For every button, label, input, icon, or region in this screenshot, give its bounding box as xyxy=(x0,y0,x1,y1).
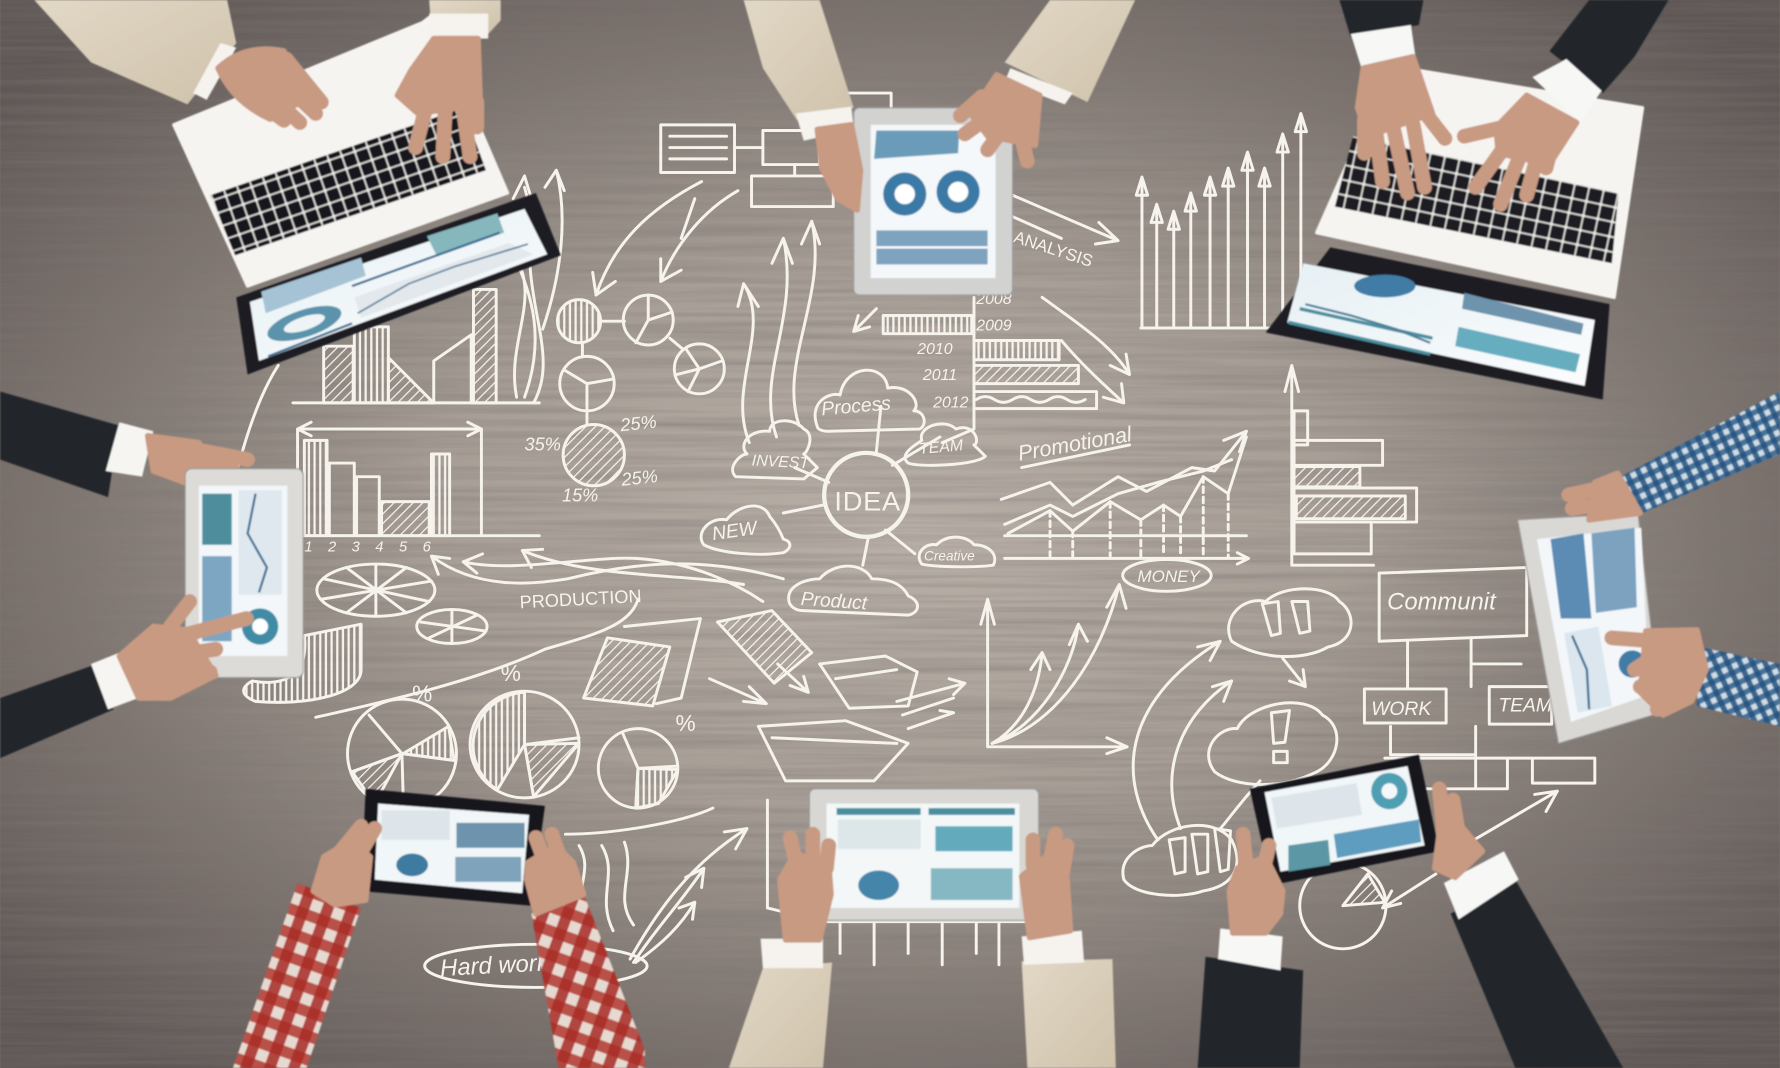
mind map labels: Promotional xyxy=(1016,421,1135,466)
community labels xyxy=(1371,588,1553,720)
chalk drawing: rising arrow bars xyxy=(1136,113,1322,328)
percentage labels: 15% xyxy=(562,486,598,506)
percentage labels xyxy=(525,412,659,506)
percent signs xyxy=(412,660,696,736)
mind map labels: IDEA xyxy=(834,486,901,517)
chalk drawing: IDEA mind map xyxy=(701,370,995,615)
chalk drawing: top-left bar chart xyxy=(239,170,564,465)
person: right with tablet xyxy=(1518,392,1780,743)
person: top centre with tablet xyxy=(744,0,1135,295)
person: bottom-right with black tablet xyxy=(1198,755,1623,1068)
percent signs: % xyxy=(675,710,696,736)
chalk drawing: 3D pies xyxy=(244,564,487,702)
chalk drawing: bottom-centre growth curves xyxy=(981,585,1127,754)
chalk drawing: promotional line chart xyxy=(1001,431,1249,591)
year labels: 2012 xyxy=(932,394,969,411)
mind map labels xyxy=(711,393,1135,615)
mind map labels: Product xyxy=(800,589,869,615)
chalk drawing: documents and folders xyxy=(584,611,965,781)
chalk drawing: exclamation clouds xyxy=(1123,589,1351,895)
percent signs: % xyxy=(412,680,432,706)
chalk drawing: community brick wall xyxy=(1300,567,1595,949)
mind map labels: Process xyxy=(821,393,892,420)
year labels: 2008 xyxy=(975,291,1012,308)
label: analysis: ANALYSIS xyxy=(1011,227,1095,271)
chalk drawing: production flow arrows xyxy=(316,549,783,717)
chalk drawing: yearly horizontal bars xyxy=(854,297,1097,443)
year labels: 2010 xyxy=(916,341,953,358)
mind map labels: NEW xyxy=(711,518,760,545)
percentage labels: 25% xyxy=(618,412,658,435)
mind map labels: Creative xyxy=(924,549,975,564)
person: top-left with white laptop xyxy=(34,0,561,375)
community labels: WORK xyxy=(1371,699,1432,720)
community labels: TEAM xyxy=(1498,696,1553,717)
year labels xyxy=(916,291,1012,411)
person: bottom-left with black tablet xyxy=(233,789,645,1068)
mind map labels: TEAM xyxy=(918,437,965,458)
year labels: 2011 xyxy=(922,367,957,384)
chalk drawing: pie charts with percent signs xyxy=(347,691,713,834)
percentage labels: 25% xyxy=(619,466,659,490)
label: production: PRODUCTION xyxy=(519,586,642,612)
chalk drawing: ANALYSIS arrows and label xyxy=(1010,195,1129,403)
year labels: 2009 xyxy=(975,317,1012,334)
percentage labels: 35% xyxy=(525,435,561,455)
label: money: MONEY xyxy=(1137,567,1201,586)
chalk drawing: flow chart top centre xyxy=(661,93,891,443)
community labels: Communit xyxy=(1387,588,1497,615)
person: left with tablet xyxy=(0,392,303,758)
label: hard work: Hard work xyxy=(439,949,550,982)
person: top-right with white laptop xyxy=(1266,0,1669,400)
axis numbers: 1 2 3 4 5 6 xyxy=(304,540,432,556)
chalk drawing: right stacked bar chart xyxy=(1285,365,1417,565)
chalk drawing: left bar chart xyxy=(298,422,539,536)
chalk drawing: pie chain with percentages xyxy=(557,182,738,486)
mind map labels: INVEST xyxy=(751,452,811,472)
person: bottom-centre with tablet xyxy=(729,789,1116,1068)
percent signs: % xyxy=(501,660,521,686)
chalk drawing: hard work burst xyxy=(425,800,1067,987)
